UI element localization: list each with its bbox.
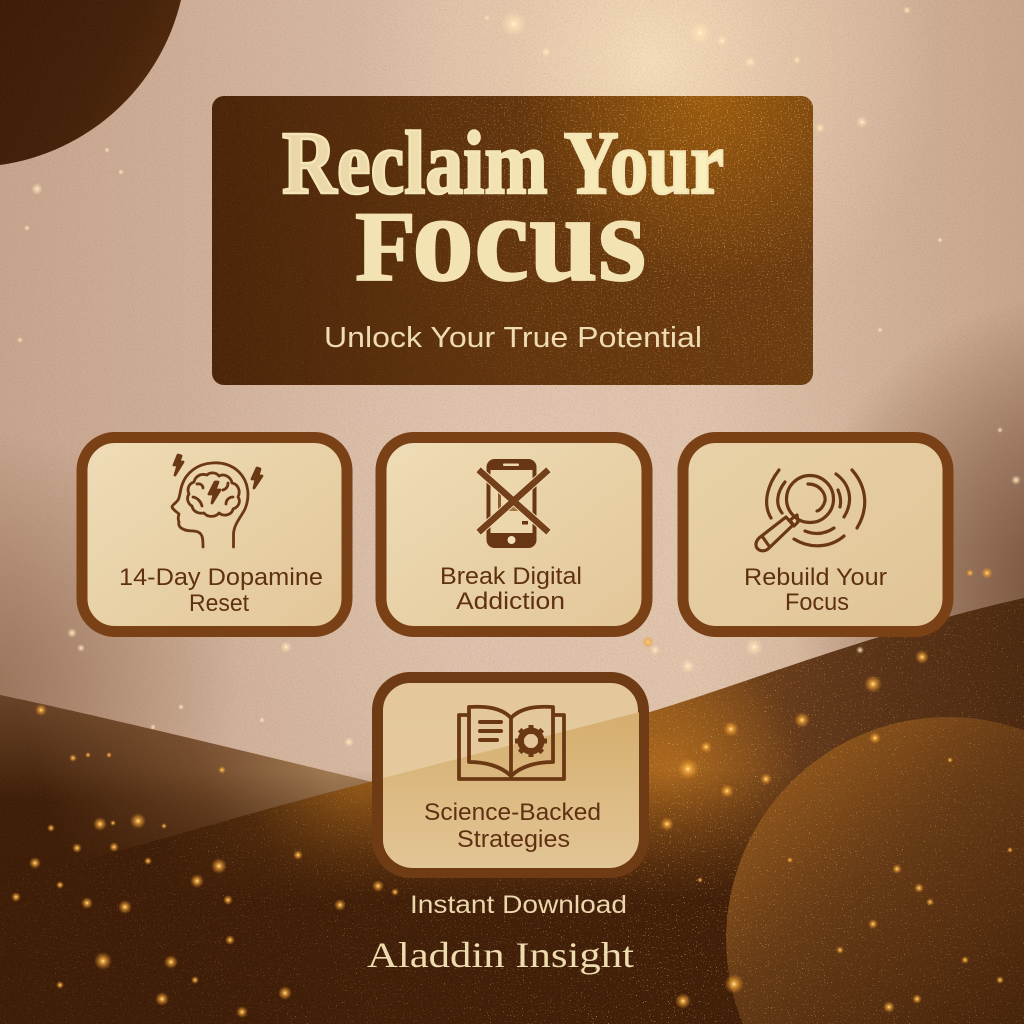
gold dust bbox=[0, 590, 1024, 1024]
brand name: Aladdin Insight bbox=[367, 935, 634, 975]
label: Reset bbox=[189, 590, 249, 617]
icon: magnifier with waves bbox=[756, 470, 865, 551]
icon: open book with gear bbox=[459, 707, 564, 779]
instant download text: Instant Download bbox=[410, 891, 627, 919]
card: Break Digital Addiction bbox=[381, 438, 647, 632]
front hill bbox=[0, 598, 1024, 1024]
title line 1: Reclaim Your bbox=[282, 114, 724, 213]
label: 14-Day Dopamine bbox=[119, 564, 323, 591]
label bbox=[424, 799, 601, 853]
hill glow bbox=[273, 683, 784, 850]
label: Strategies bbox=[457, 826, 570, 853]
icon: crossed out phone bbox=[481, 459, 546, 548]
card: Rebuild Your Focus bbox=[683, 438, 948, 632]
left hill bbox=[0, 695, 372, 1024]
label bbox=[440, 563, 582, 615]
circle: bottom right bbox=[726, 717, 1024, 1024]
header panel bbox=[212, 96, 813, 385]
label: Break Digital bbox=[440, 563, 582, 590]
label: Focus bbox=[785, 589, 849, 616]
glitter above hill bbox=[616, 557, 770, 703]
label bbox=[119, 564, 323, 617]
bottom shade bbox=[0, 770, 1024, 1024]
subtitle: Unlock Your True Potential bbox=[324, 322, 702, 354]
card: Science-Backed Strategies bbox=[378, 678, 644, 872]
icon: brain in head bbox=[172, 455, 262, 547]
title line 2: F bbox=[355, 191, 416, 302]
label: Addiction bbox=[456, 588, 565, 615]
label: Science-Backed bbox=[424, 799, 601, 826]
circle: top left bbox=[0, 0, 181, 165]
card: 14-Day Dopamine Reset bbox=[82, 438, 347, 632]
label: Rebuild Your bbox=[744, 564, 887, 591]
title line 2: ocus bbox=[412, 170, 646, 307]
label bbox=[744, 564, 887, 616]
